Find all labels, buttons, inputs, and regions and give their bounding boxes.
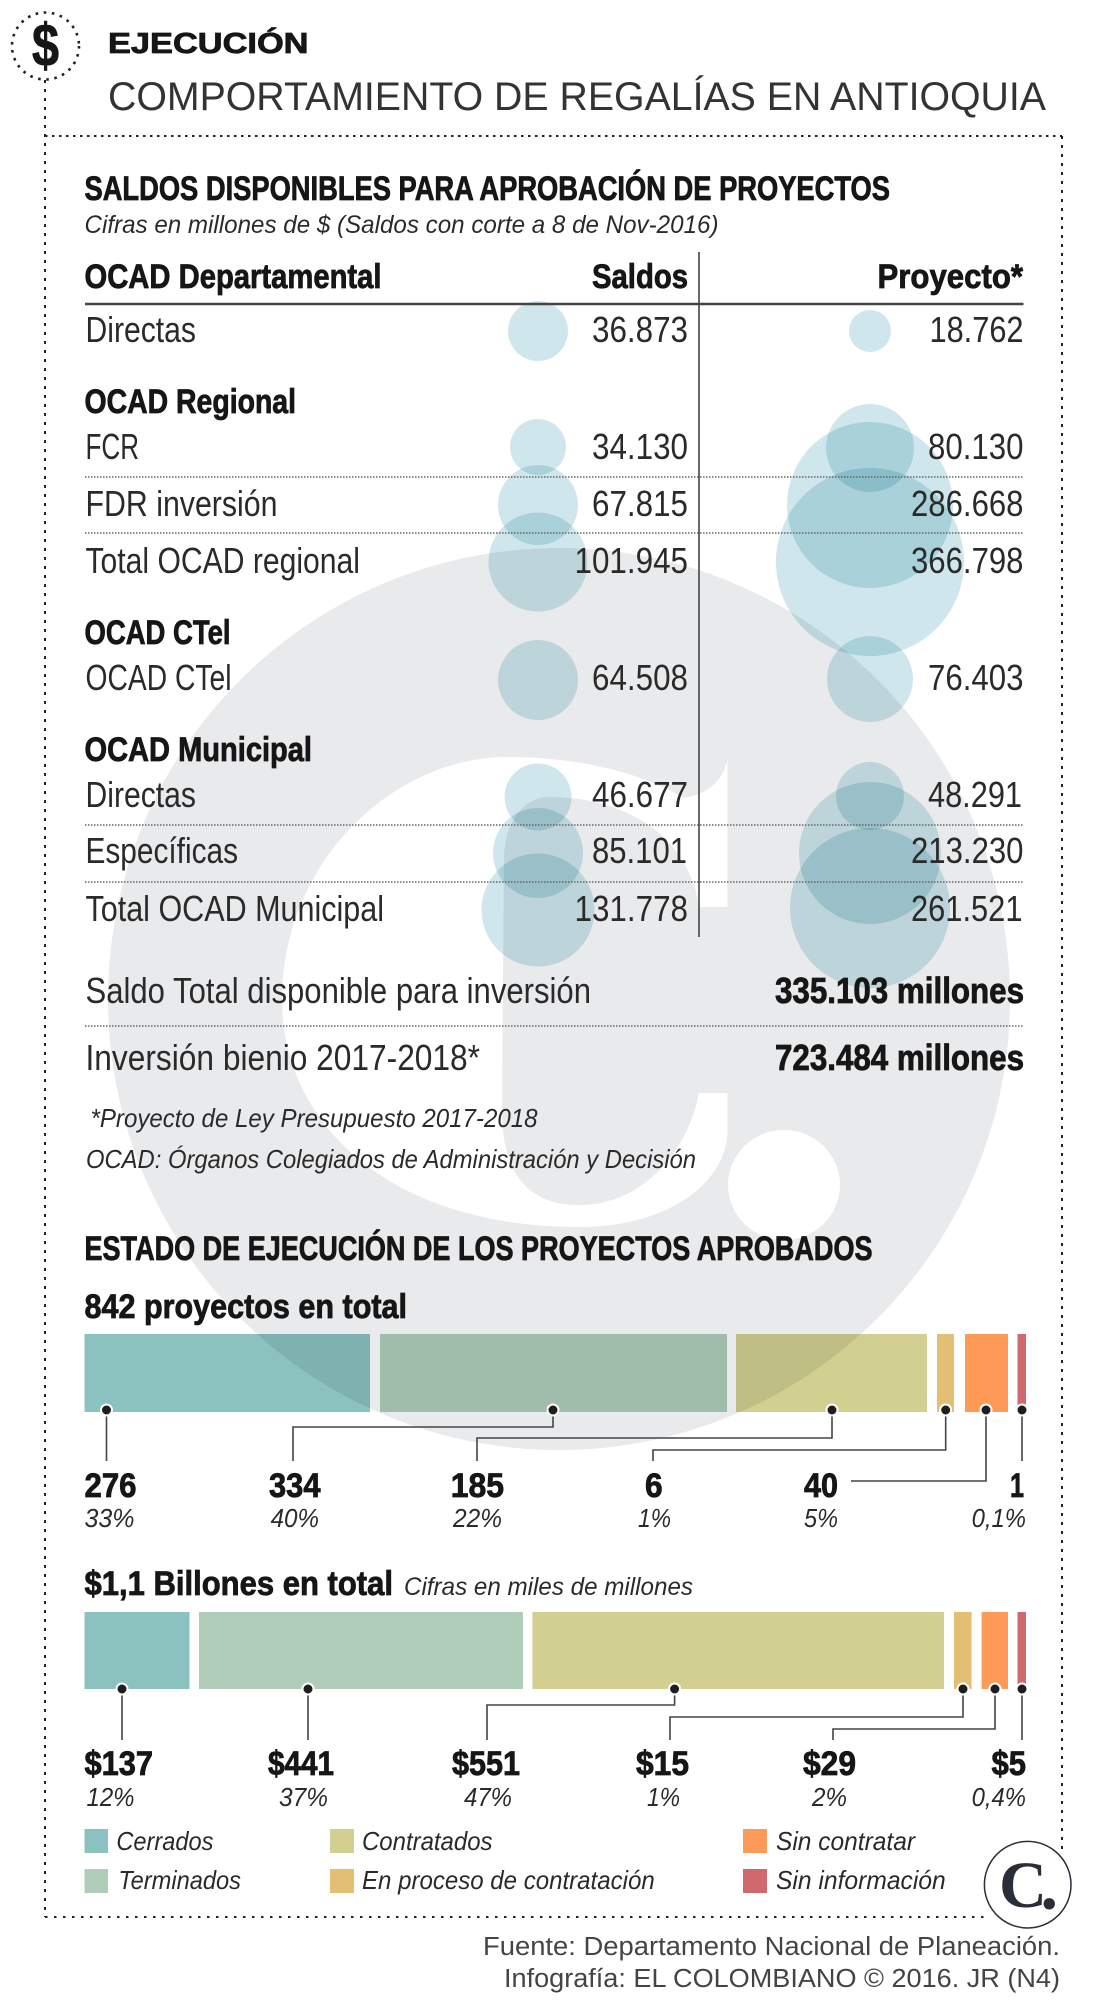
logo: El Colombiano C. xyxy=(984,1841,1071,1928)
values: proyectos: 40% xyxy=(271,1503,319,1533)
group heading: OCAD Regional: OCAD Regional xyxy=(84,383,296,421)
values: billones: 2% xyxy=(811,1782,847,1812)
row: Directas departamental: 18.762 xyxy=(930,309,1024,350)
values: billones: $551 xyxy=(452,1745,520,1783)
heading: billones: Cifras en miles de millones xyxy=(404,1573,693,1601)
source credits xyxy=(483,1933,1060,1993)
values: billones: 37% xyxy=(279,1782,328,1812)
row: Total OCAD regional xyxy=(86,540,1024,581)
totals: saldo total and inversión bienio xyxy=(85,970,1024,1078)
row: OCAD CTel xyxy=(86,657,1024,698)
values: billones: 47% xyxy=(464,1782,512,1812)
row: Total OCAD Municipal: 261.521 xyxy=(911,888,1022,929)
row: FDR inversión xyxy=(86,483,1024,524)
bubbles: proyecto column xyxy=(776,310,964,988)
row: Total OCAD Municipal: Total OCAD Municipal xyxy=(86,888,384,929)
title: COMPORTAMIENTO DE REGALÍAS EN ANTIOQUIA xyxy=(108,74,1046,119)
row: Específicas: 213.230 xyxy=(911,830,1024,871)
row: Total OCAD regional: 366.798 xyxy=(911,540,1024,581)
row: FCR: FCR xyxy=(86,426,139,467)
bubbles: saldos column xyxy=(482,301,594,966)
values: proyectos: 33% xyxy=(84,1503,134,1533)
values: proyectos: 40 xyxy=(804,1467,838,1505)
values: billones: 12% xyxy=(86,1782,134,1812)
icon: dollar sign in dotted circle xyxy=(12,12,79,80)
values: billones: $29 xyxy=(803,1745,856,1783)
row: Directas departamental: Directas xyxy=(86,309,196,350)
group heading: OCAD CTel: OCAD CTel xyxy=(84,614,230,652)
values: proyectos: 5% xyxy=(804,1503,838,1533)
title: EJECUCIÓN xyxy=(108,26,308,60)
row: Directas departamental: 36.873 xyxy=(592,309,688,350)
values: billones xyxy=(84,1745,1026,1812)
values: proyectos xyxy=(84,1467,1026,1533)
table: saldos and proyecto xyxy=(84,252,1024,937)
notes: *Proyecto de Ley Presupuesto 2017-2018 xyxy=(90,1103,538,1133)
source credits: Infografía: EL COLOMBIANO © 2016. JR (N4) xyxy=(504,1965,1060,1993)
values: proyectos: 1 xyxy=(1010,1467,1024,1505)
legend: En proceso de contratación xyxy=(362,1865,655,1895)
totals: saldo total and inversión bienio: Inversión bienio 2017-2018* xyxy=(86,1037,480,1078)
legend: Contratados xyxy=(362,1826,492,1856)
values: proyectos: 334 xyxy=(269,1467,321,1505)
row: OCAD CTel: 76.403 xyxy=(928,657,1024,698)
row: Específicas: 85.101 xyxy=(592,830,687,871)
group heading: OCAD Municipal: OCAD Municipal xyxy=(84,731,312,769)
values: billones: $15 xyxy=(636,1745,689,1783)
row: FDR inversión: 286.668 xyxy=(911,483,1024,524)
row: Total OCAD Municipal xyxy=(86,888,1022,929)
legend: Sin información xyxy=(776,1865,946,1895)
column headers xyxy=(84,258,1024,296)
row: OCAD CTel: OCAD CTel xyxy=(86,657,232,698)
row: Específicas xyxy=(86,830,1024,871)
row: Directas municipal: 46.677 xyxy=(592,774,688,815)
logo: El Colombiano C.: C xyxy=(999,1849,1047,1922)
subtitle: cifras en millones: Cifras en millones de $ (Saldos con corte a 8 de Nov-2016) xyxy=(84,211,718,239)
legend xyxy=(84,1826,946,1895)
totals: saldo total and inversión bienio: 335.103 millones xyxy=(775,970,1024,1011)
heading: billones xyxy=(84,1565,693,1603)
values: billones: $441 xyxy=(268,1745,334,1783)
values: proyectos: 1% xyxy=(638,1503,671,1533)
row: Total OCAD Municipal: 131.778 xyxy=(574,888,688,929)
row: Total OCAD regional: Total OCAD regional xyxy=(86,540,360,581)
row: FCR: 34.130 xyxy=(592,426,688,467)
values: billones: 0,4% xyxy=(972,1782,1026,1812)
title xyxy=(108,26,1046,119)
legend: Sin contratar xyxy=(776,1826,916,1856)
notes: OCAD: Órganos Colegiados de Administración y Decisión xyxy=(86,1144,696,1174)
values: billones: $137 xyxy=(84,1745,153,1783)
values: proyectos: 22% xyxy=(452,1503,502,1533)
values: proyectos: 0,1% xyxy=(972,1503,1026,1533)
row: Directas departamental xyxy=(86,309,1024,350)
icon: dollar sign in dotted circle: $ xyxy=(32,12,59,79)
source credits: Fuente: Departamento Nacional de Planeación. xyxy=(483,1933,1060,1961)
row: FCR: 80.130 xyxy=(928,426,1024,467)
watermark: El Colombiano C. logo xyxy=(108,548,1010,1450)
values: billones: 1% xyxy=(647,1782,680,1812)
values: proyectos: 276 xyxy=(84,1467,136,1505)
legend: Cerrados xyxy=(116,1826,213,1856)
connectors: proyectos xyxy=(101,1404,1028,1481)
logo: El Colombiano C.: . xyxy=(1040,1848,1058,1924)
heading: billones: $1,1 Billones en total xyxy=(84,1565,393,1603)
values: proyectos: 185 xyxy=(451,1467,504,1505)
values: proyectos: 6 xyxy=(645,1467,663,1505)
totals: saldo total and inversión bienio: 723.484 millones xyxy=(775,1037,1024,1078)
row: OCAD CTel: 64.508 xyxy=(592,657,688,698)
column headers: Proyecto* xyxy=(878,258,1024,296)
stacked bar: proyectos xyxy=(84,1334,1026,1412)
legend: Terminados xyxy=(118,1865,241,1895)
heading: 842 proyectos: 842 proyectos en total xyxy=(84,1288,407,1326)
heading: estado de ejecución: ESTADO DE EJECUCIÓN DE LOS PROYECTOS APROBADOS xyxy=(84,1230,872,1268)
connectors: billones xyxy=(116,1684,1028,1740)
row: FCR xyxy=(86,426,1024,467)
column headers: Saldos xyxy=(592,258,688,296)
row: Total OCAD regional: 101.945 xyxy=(574,540,688,581)
values: billones: $5 xyxy=(992,1745,1026,1783)
row: Específicas: Específicas xyxy=(86,830,238,871)
row: Directas municipal: Directas xyxy=(86,774,196,815)
totals: saldo total and inversión bienio: Saldo Total disponible para inversión xyxy=(86,970,591,1011)
row: Directas municipal xyxy=(86,774,1022,815)
heading: saldos disponibles: SALDOS DISPONIBLES PARA APROBACIÓN DE PROYECTOS xyxy=(84,170,890,208)
stacked bar: billones xyxy=(84,1612,1026,1689)
notes xyxy=(86,1103,696,1174)
column headers: OCAD Departamental xyxy=(84,258,382,296)
row: FDR inversión: FDR inversión xyxy=(86,483,278,524)
row: Directas municipal: 48.291 xyxy=(928,774,1022,815)
row: FDR inversión: 67.815 xyxy=(592,483,688,524)
